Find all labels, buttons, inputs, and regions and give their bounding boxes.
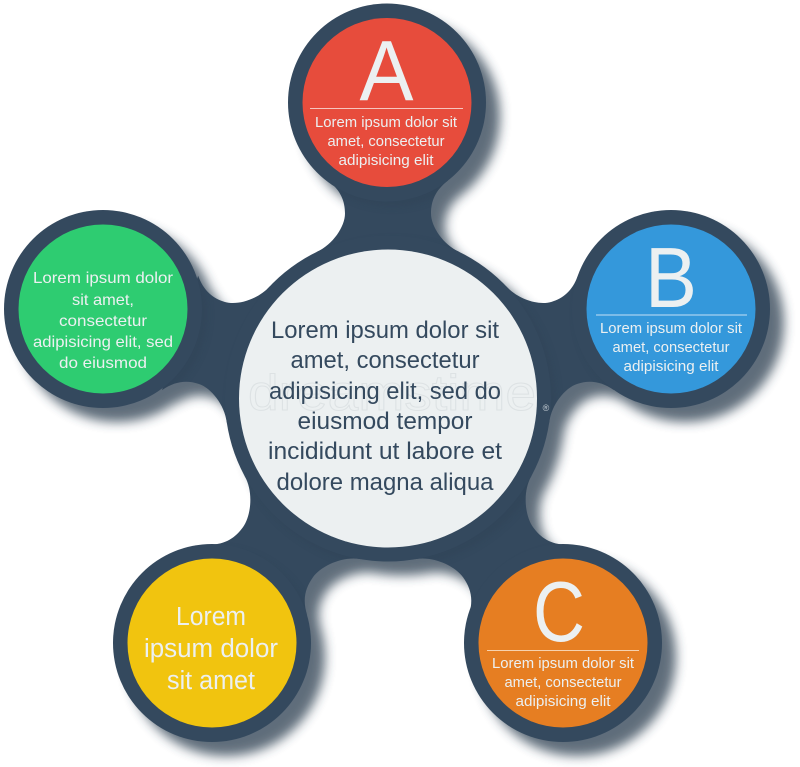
text yellow: Lorem — [176, 603, 246, 631]
text B: amet, consectetur — [612, 340, 730, 356]
text green: consectetur — [59, 313, 148, 330]
text green — [33, 270, 174, 372]
centre text: eiusmod tempor — [298, 408, 473, 435]
watermark: dreamstime — [248, 365, 536, 421]
centre text: dolore magna aliqua — [276, 469, 494, 496]
text A — [315, 115, 457, 169]
text C — [492, 656, 634, 710]
text A: adipisicing elit — [338, 153, 434, 169]
centre text: Lorem ipsum dolor sit — [271, 317, 499, 344]
text C: amet, consectetur — [504, 675, 622, 691]
centre text: adipisicing elit, sed do — [269, 378, 501, 405]
panel: C — [478, 558, 648, 728]
text C: adipisicing elit — [516, 694, 610, 710]
text yellow: sit amet — [167, 667, 255, 695]
letter C: C — [533, 565, 585, 660]
text yellow — [144, 603, 279, 695]
text green: adipisicing elit, sed — [33, 334, 173, 351]
letter A: A — [360, 24, 414, 119]
text yellow: ipsum dolor — [144, 635, 279, 663]
text green: Lorem ipsum dolor — [33, 270, 174, 287]
centre text: incididunt ut labore et — [268, 438, 502, 465]
text green: sit amet, — [72, 292, 134, 309]
panel: green — [18, 224, 188, 394]
centre text — [268, 317, 502, 496]
panel: A — [302, 18, 472, 187]
text B: Lorem ipsum dolor sit — [600, 321, 742, 337]
centre text: amet, consectetur — [290, 347, 480, 374]
text B — [600, 321, 742, 375]
text B: adipisicing elit — [624, 359, 718, 375]
text A: amet, consectetur — [328, 134, 445, 150]
panel: B — [586, 224, 756, 394]
letter B: B — [645, 231, 697, 326]
text A: Lorem ipsum dolor sit — [315, 115, 457, 131]
text C: Lorem ipsum dolor sit — [492, 656, 634, 672]
watermark: ® — [543, 403, 550, 413]
text green: do eiusmod — [59, 355, 147, 372]
panel: centre circle — [239, 250, 550, 548]
panel: yellow — [128, 558, 296, 728]
